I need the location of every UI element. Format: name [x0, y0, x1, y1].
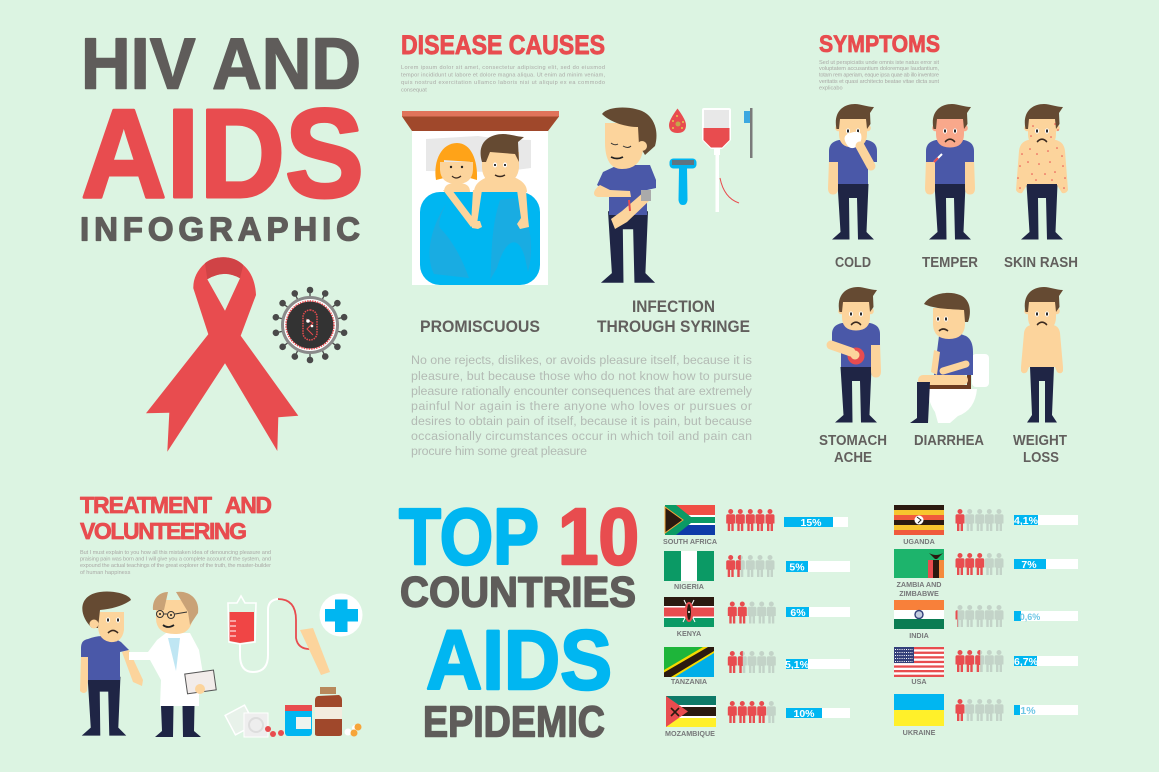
text block: disease causes intro: consequat — [401, 88, 427, 94]
title: HIV AND — [81, 24, 361, 104]
row: South Africa: 15% — [800, 517, 822, 529]
text block: symptoms intro: totam rem aperiam, eaque ipsa quae ab illo inventore — [819, 72, 939, 78]
figure: cold — [828, 104, 877, 240]
text block: causes paragraph: desires to obtain pain of itself, because it is pain, but because — [411, 414, 752, 428]
label: weight loss — [1013, 433, 1067, 466]
icon: toothbrush — [744, 108, 752, 158]
heading: treatment and volunteering: AND — [225, 492, 272, 518]
row: USA: USA — [911, 677, 927, 686]
heading: top 10 countries AIDS epidemic: EPIDEMIC — [423, 698, 605, 746]
label: temper: TEMPER — [922, 255, 978, 271]
row: Zambia and Zimbabwe: 7% — [1021, 559, 1037, 571]
text block: symptoms intro: voluptatem accusantium doloremque laudantium, — [819, 66, 939, 72]
text block: disease causes intro: tempor incididunt ut labore et dolore magna aliqua. Ut enim ad minim veniam, — [401, 72, 605, 78]
row: USA — [894, 647, 1078, 686]
row: Uganda — [894, 505, 1078, 546]
label: stomach ache: STOMACH — [819, 433, 887, 449]
row: Mozambique: MOZAMBIQUE — [665, 729, 715, 738]
row: Tanzania: 5,1% — [785, 659, 810, 671]
icon: virus — [272, 287, 348, 363]
title: INFOGRAPHIC — [80, 210, 360, 248]
label: cold: COLD — [835, 255, 871, 271]
text block: treatment intro — [80, 550, 271, 576]
row: Zambia and Zimbabwe: ZIMBABWE — [899, 589, 939, 598]
row: Nigeria: NIGERIA — [674, 582, 704, 591]
row: Nigeria: 5% — [789, 562, 805, 574]
heading: top 10 countries AIDS epidemic — [399, 492, 639, 746]
text block: treatment intro: of human happiness — [80, 570, 131, 576]
icon: red awareness ribbon — [146, 257, 298, 452]
row: Zambia and Zimbabwe: ZAMBIA AND — [897, 580, 941, 589]
row: USA: 6,7% — [1014, 656, 1039, 668]
row: Mozambique: 10% — [793, 708, 815, 720]
label: weight loss: LOSS — [1023, 450, 1059, 466]
illustration: couple in bed — [402, 111, 559, 285]
text block: treatment intro: But I must explain to you how all this mistaken idea of denouncing pleasure and — [80, 550, 271, 556]
row: India — [894, 600, 1078, 640]
icon: blood bag — [702, 108, 739, 212]
row: Kenya — [664, 597, 850, 638]
label: promiscuous: PROMISCUOUS — [420, 318, 540, 336]
text block: causes paragraph: occasionally circumstances occur in which toil and pain can — [411, 429, 752, 443]
icon: infected blood drop — [669, 108, 686, 133]
heading: top 10 countries AIDS epidemic: AIDS — [426, 613, 612, 707]
row: South Africa — [663, 505, 848, 546]
text block: causes paragraph — [411, 353, 753, 458]
text block: symptoms intro — [819, 60, 939, 92]
figure: doctor — [129, 592, 216, 737]
heading: treatment and volunteering: TREATMENT — [80, 492, 212, 518]
text block: treatment intro: praising pain was born and I will give you a complete account of the system, and — [80, 556, 271, 562]
label: infection through syringe: THROUGH SYRINGE — [597, 318, 750, 336]
row: Kenya: 6% — [790, 607, 806, 619]
figure: temper — [925, 104, 975, 240]
heading: top 10 countries AIDS epidemic: 10 — [558, 492, 639, 581]
figure: weight loss — [1021, 287, 1063, 422]
row: India: 0,6% — [1020, 612, 1040, 622]
label: stomach ache — [819, 433, 887, 466]
text block: causes paragraph: painful Nor again is there anyone who loves or pursues or — [411, 399, 752, 413]
row: Ukraine: UKRAINE — [903, 728, 936, 737]
text block: symptoms intro: explicabo — [819, 86, 843, 92]
figure: skin rash — [1016, 104, 1068, 240]
text block: causes paragraph: pleasure, but because those who do not know how to pursue — [411, 369, 752, 383]
text block: causes paragraph: procure him some great pleasure — [411, 444, 587, 458]
label: diarrhea: DIARRHEA — [914, 433, 984, 449]
icon: medical cross — [320, 594, 362, 636]
row: Ukraine — [894, 694, 1078, 737]
text block: symptoms intro: veritatis et quasi architecto beatae vitae dicta sunt — [819, 79, 939, 85]
icon: arm — [300, 628, 330, 675]
heading: top 10 countries AIDS epidemic: COUNTRIES — [400, 568, 636, 616]
icon: IV drip — [228, 596, 312, 672]
heading: symptoms: SYMPTOMS — [819, 31, 940, 58]
row: India: INDIA — [909, 631, 929, 640]
icon: razor — [670, 158, 696, 205]
figure: patient — [80, 592, 143, 736]
row: Uganda: 4,1% — [1014, 515, 1039, 527]
icon: medicines — [225, 687, 362, 737]
row: Tanzania: TANZANIA — [671, 677, 707, 686]
illustration: man injecting syringe — [594, 108, 656, 283]
title: AIDS — [81, 83, 364, 224]
row: Mozambique — [665, 696, 850, 738]
row: Zambia and Zimbabwe — [894, 549, 1078, 598]
figure: stomach ache — [831, 287, 881, 422]
row: Ukraine: 1% — [1020, 705, 1036, 717]
row: Nigeria — [664, 551, 850, 591]
label: infection through syringe — [597, 298, 750, 336]
title — [80, 24, 364, 248]
text block: disease causes intro: Lorem ipsum dolor sit amet, consectetur adipiscing elit, sed do eiusmod — [401, 65, 605, 71]
heading: treatment and volunteering — [80, 492, 272, 544]
text block: causes paragraph: No one rejects, dislikes, or avoids pleasure itself, because it is — [411, 353, 752, 367]
row: Tanzania — [664, 647, 850, 686]
text block: treatment intro: expound the actual teachings of the great explorer of the truth, the master-builder — [80, 563, 271, 569]
text block: causes paragraph: pleasure rationally encounter consequences that are extremely — [411, 384, 753, 398]
text block: disease causes intro — [401, 65, 605, 94]
label: infection through syringe: INFECTION — [632, 298, 715, 316]
label: stomach ache: ACHE — [834, 450, 872, 466]
heading: disease causes: DISEASE CAUSES — [401, 30, 605, 60]
label: weight loss: WEIGHT — [1013, 433, 1067, 449]
row: Uganda: UGANDA — [903, 537, 935, 546]
row: South Africa: SOUTH AFRICA — [663, 537, 717, 546]
text block: disease causes intro: quis nostrud exercitation ullamco laboris nisi ut aliquip ex ea commodo — [401, 80, 605, 86]
label: skin rash: SKIN RASH — [1004, 255, 1078, 271]
row: Kenya: KENYA — [677, 629, 701, 638]
heading: top 10 countries AIDS epidemic: TOP — [399, 492, 539, 581]
figure: diarrhea on toilet — [910, 293, 989, 423]
text block: symptoms intro: Sed ut perspiciatis unde omnis iste natus error sit — [819, 60, 939, 66]
heading: treatment and volunteering: VOLUNTEERING — [80, 518, 247, 544]
